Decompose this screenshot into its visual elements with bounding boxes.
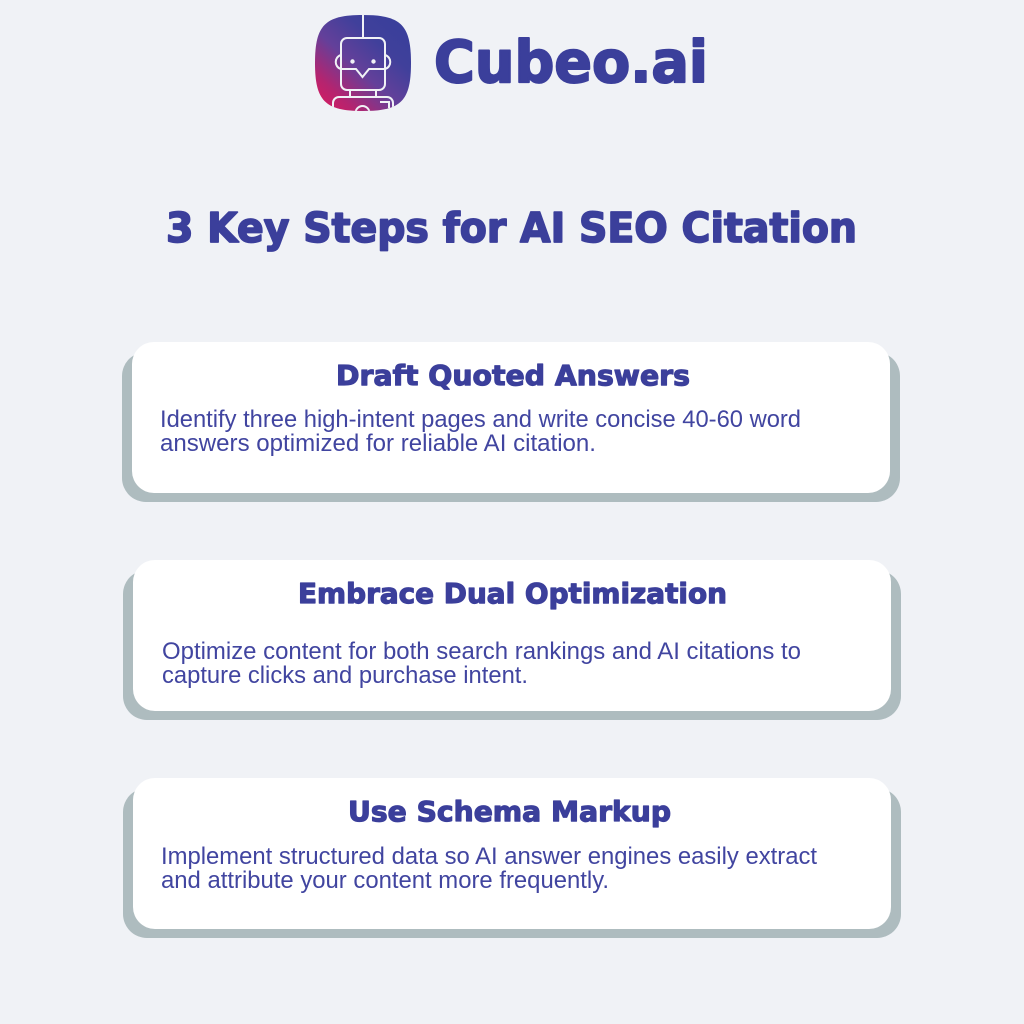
text: embrace dual optimization description [162,638,801,689]
icon: robot [315,15,411,111]
text: draft quoted answers description [160,406,801,457]
text: draft quoted answers description: answers optimized for reliable AI citation. [160,430,596,457]
text: draft quoted answers description: Identify three high-intent pages and write concise 40-60 word [160,406,801,433]
text: embrace dual optimization description: capture clicks and purchase intent. [162,662,528,689]
panel: draft quoted answers [122,342,900,502]
text: use schema markup description: Implement structured data so AI answer engines easily extract [161,843,817,870]
heading: draft quoted answers: Draft Quoted Answers [336,359,690,392]
text: use schema markup description: and attribute your content more frequently. [161,867,609,894]
text: use schema markup description [161,843,817,894]
title: 3 Key Steps for AI SEO Citation [166,204,857,252]
panel: embrace dual optimization [123,560,901,720]
heading: embrace dual optimization: Embrace Dual Optimization [298,577,727,610]
text: embrace dual optimization description: Optimize content for both search rankings and AI citations to [162,638,801,665]
logo wordmark: Cubeo.ai [434,28,708,96]
panel: use schema markup [123,778,901,938]
logo [315,15,704,111]
heading: use schema markup: Use Schema Markup [348,795,671,828]
